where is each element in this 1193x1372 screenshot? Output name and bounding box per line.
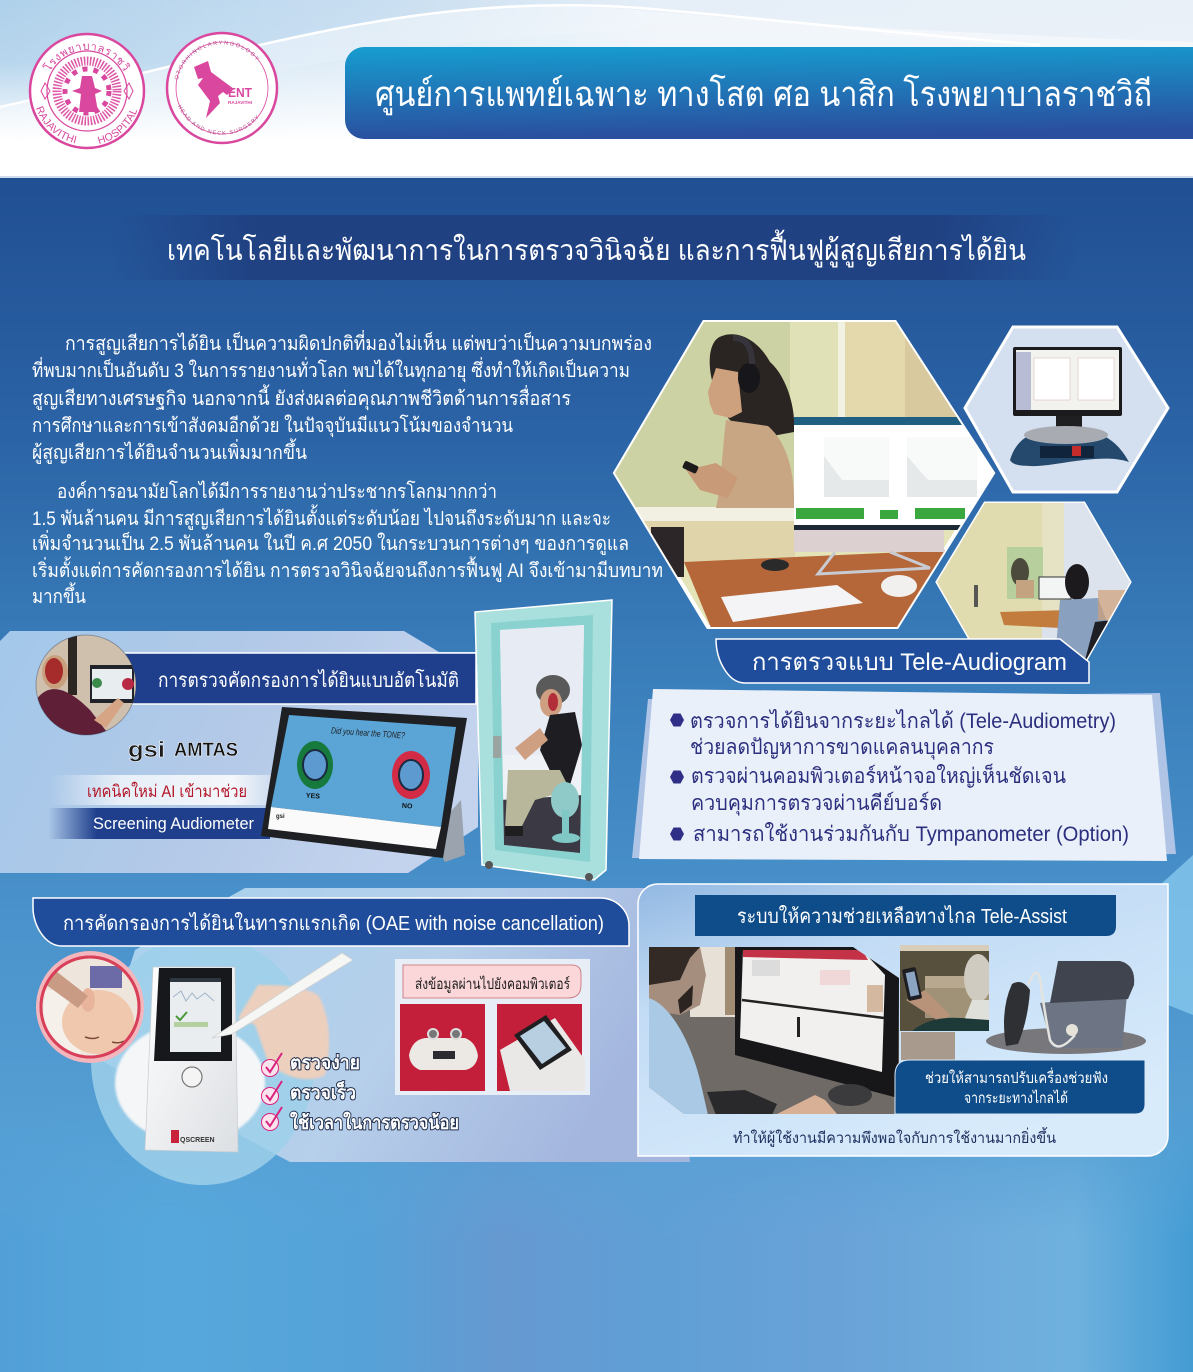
intro text block: ที่พบมากเป็นอันดับ 3 ในการรายงานทั่วโลก พบได้ในทุกอายุ ซึ่งทำให้เกิดเป็นความ: [32, 357, 630, 383]
banner: automatic screening title: [120, 653, 476, 704]
intro text block: การศึกษาและการเข้าสังคมอีกด้วย ในปัจจุบันมีแนวโน้มของจำนวน: [32, 414, 513, 438]
label: new AI technique: เทคนิคใหม่ AI เข้ามาช่วย: [87, 781, 247, 801]
photo: patient using touch screen: [36, 635, 136, 736]
intro text block: องค์การอนามัยโลกได้มีการรายงานว่าประชากรโลกมากกว่า: [57, 480, 497, 503]
logo: ENT Rajavithi seal: ENT: [228, 85, 252, 100]
illustration: tablet with yes no screen: NO: [402, 803, 413, 810]
intro text block: 1.5 พันล้านคน มีการสูญเสียการได้ยินตั้งแต่ระดับน้อย ไปจนถึงระดับมาก และจะ: [32, 504, 611, 531]
logo: gsi AMTAS: [128, 737, 238, 762]
photo: newborn baby: [36, 951, 144, 1063]
banner: Tele-Assist title: [695, 895, 1116, 936]
logo: Rajavithi Hospital seal: HOSPITAL: [98, 110, 138, 144]
illustration: hearing booth: [475, 600, 612, 881]
panel: newborn hearing screening: [33, 888, 690, 1185]
bullet list: ตรวจผ่านคอมพิวเตอร์หน้าจอใหญ่เห็นชัดเจน: [691, 762, 1066, 788]
illustration: tablet with yes no screen: [261, 707, 467, 862]
bullet list: ควบคุมการตรวจผ่านคีย์บอร์ด: [691, 791, 942, 816]
intro text block: การสูญเสียการได้ยิน เป็นความผิดปกติที่มองไม่เห็น แต่พบว่าเป็นความบกพร่อง: [65, 330, 652, 356]
intro text block: เพิ่มจำนวนเป็น 2.5 พันล้านคน ในปี ค.ศ 2050 ในกระบวนการต่างๆ ของการดูแล: [32, 530, 629, 556]
hexagon photo: sound booth with operator: [937, 503, 1134, 663]
bullet list: ช่วยลดปัญหาการขาดแคลนบุคลากร: [690, 736, 994, 760]
bullet list: สามารถใช้งานร่วมกันกับ Tympanometer (Option): [693, 822, 1129, 846]
logo: ENT Rajavithi seal: HEAD AND NECK SURGERY: [178, 104, 258, 135]
illustration: hand holding stylus: [212, 953, 353, 1079]
bullet list: ตรวจการได้ยินจากระยะไกลได้ (Tele-Audiometry): [690, 709, 1116, 733]
panel: Tele-Audiogram features: [632, 689, 1176, 861]
illustration: QScreen device: [115, 967, 265, 1152]
panel: send data to computer: [395, 959, 590, 1095]
logo: Rajavithi Hospital seal: RAJAVITHI: [36, 106, 76, 144]
intro text block: ผู้สูญเสียการได้ยินจำนวนเพิ่มมากขึ้น: [32, 438, 307, 465]
intro text block: เริ่มตั้งแต่การคัดกรองการได้ยิน การตรวจวินิจฉัยจนถึงการฟื้นฟู AI จึงเข้ามามีบทบาท: [32, 556, 663, 583]
list: easy, fast, short time: [262, 1053, 459, 1134]
illustration: hearing aids in case: [986, 961, 1146, 1054]
label: remote hearing aid adjustment: [895, 1060, 1145, 1114]
caption: user satisfaction: ทำให้ผู้ใช้งานมีความพึงพอใจกับการใช้งานมากยิ่งขึ้น: [733, 1127, 1056, 1147]
label: remote hearing aid adjustment: จากระยะทางไกลได้: [964, 1089, 1068, 1107]
logo: ENT Rajavithi seal: [166, 32, 278, 144]
logo: ENT Rajavithi seal: RAJAVITHI: [228, 100, 252, 105]
illustration: tablet with yes no screen: gsi: [276, 814, 285, 820]
label: Screening Audiometer: [48, 808, 270, 839]
bullet list: [670, 709, 1129, 846]
logo: Rajavithi Hospital seal: [28, 32, 146, 150]
banner: Tele-Audiogram: การตรวจแบบ Tele-Audiogram: [752, 649, 1067, 676]
title banner: [345, 47, 1193, 139]
list: easy, fast, short time: ตรวจเร็ว: [290, 1080, 356, 1104]
banner: Tele-Assist title: ระบบให้ความช่วยเหลือทางไกล Tele-Assist: [737, 905, 1067, 928]
illustration: tablet with yes no screen: YES: [306, 793, 320, 801]
banner: OAE title: [33, 898, 629, 946]
photo: patient on video call: [900, 945, 992, 1060]
banner: Tele-Audiogram: [716, 639, 1089, 683]
panel: automatic hearing screening: [0, 631, 478, 873]
banner: OAE title: การคัดกรองการได้ยินในทารกแรกเกิด (OAE with noise cancellation): [63, 912, 604, 935]
logo: gsi AMTAS: AMTAS: [174, 740, 238, 761]
main heading: [110, 215, 1080, 280]
list: easy, fast, short time: ตรวจง่าย: [290, 1053, 360, 1074]
main heading: เทคโนโลยีและพัฒนาการในการตรวจวินิจฉัย และการฟื้นฟูผู้สูญเสียการได้ยิน: [167, 229, 1026, 268]
hexagon photo: audiometer with computer: [965, 327, 1168, 492]
banner: automatic screening title: การตรวจคัดกรองการได้ยินแบบอัตโนมัติ: [158, 669, 459, 692]
intro text block: มากขึ้น: [32, 582, 86, 608]
label: Screening Audiometer: Screening Audiometer: [93, 814, 254, 833]
list: easy, fast, short time: ใช้เวลาในการตรวจน้อย: [290, 1111, 459, 1134]
logo: gsi AMTAS: gsi: [128, 737, 165, 762]
panel: Tele-Assist: [638, 884, 1168, 1156]
photo: audiologist at computer: [649, 947, 899, 1115]
intro text block: สูญเสียทางเศรษฐกิจ นอกจากนี้ ยังส่งผลต่อคุณภาพชีวิตด้านการสื่อสาร: [32, 384, 571, 411]
panel: send data to computer: ส่งข้อมูลผ่านไปยังคอมพิวเตอร์: [415, 975, 570, 993]
hexagon photo: hearing test with monitor: [610, 320, 995, 630]
illustration: tablet with yes no screen: Did you hear the TONE?: [331, 725, 405, 741]
logo: ENT Rajavithi seal: OTORHINOLARYNGOLOGY: [174, 40, 260, 80]
label: new AI technique: [50, 775, 280, 805]
illustration: QScreen device: QSCREEN: [180, 1137, 215, 1144]
intro text block: [32, 330, 663, 608]
label: remote hearing aid adjustment: ช่วยให้สามารถปรับเครื่องช่วยฟัง: [925, 1067, 1108, 1087]
